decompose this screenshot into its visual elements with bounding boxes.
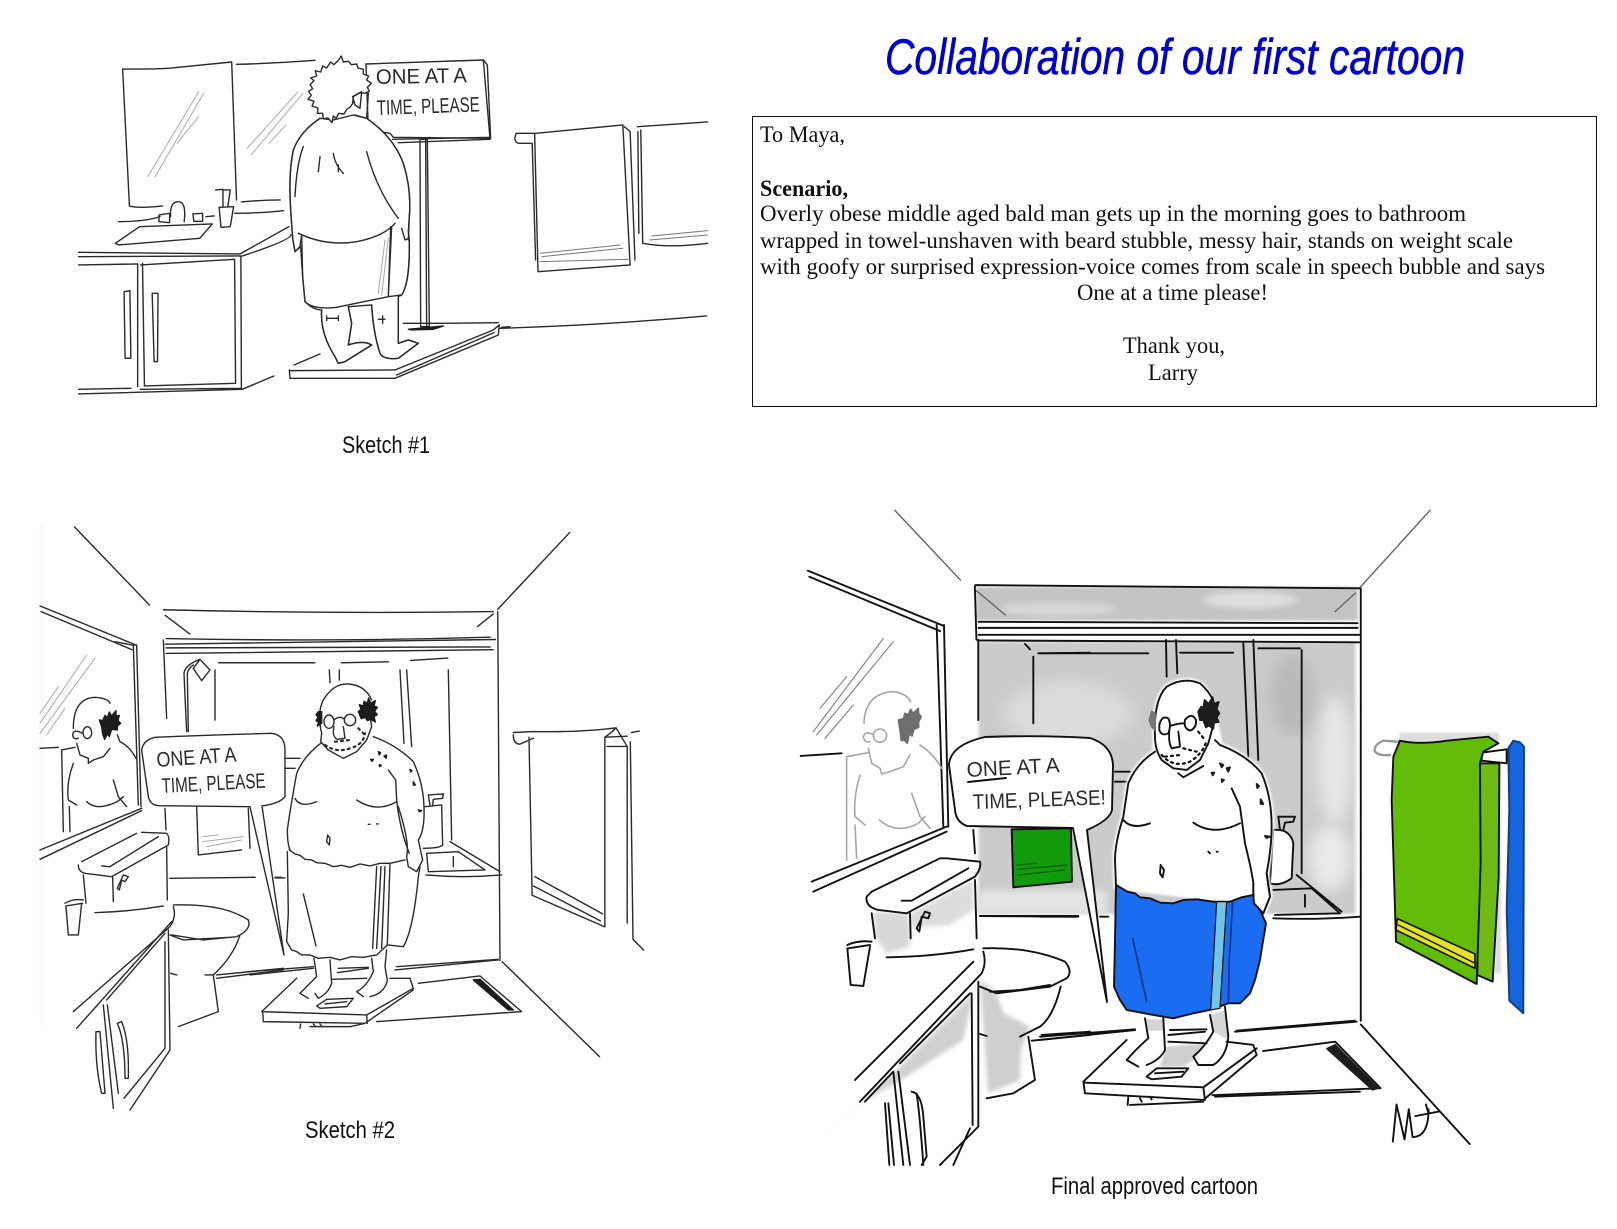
bubble text <box>156 743 266 798</box>
wall lines <box>170 876 285 879</box>
bubble text: TIME, PLEASE <box>161 770 266 798</box>
floor lines <box>250 959 522 1022</box>
head <box>320 684 372 758</box>
toilet <box>980 948 1090 1098</box>
small towel behind bubble <box>197 807 250 855</box>
text block: letter to Maya: Overly obese middle aged bald man gets up in the morning goes to bathroom <box>760 201 1466 226</box>
text block: letter to Maya: Thank you, <box>1123 333 1225 358</box>
text block: letter to Maya: Larry <box>1148 360 1198 385</box>
sign text: ONE AT A <box>376 64 467 89</box>
sign, man and scale <box>289 56 510 378</box>
text block: letter to Maya: Scenario, <box>760 176 848 201</box>
towel <box>287 850 420 960</box>
title: Collaboration of our first cartoon <box>885 29 1465 85</box>
speech bubble <box>949 736 1113 1002</box>
man, tub and scale <box>1040 640 1360 1067</box>
caption: Sketch #1 <box>342 432 430 459</box>
lower man and scale <box>1040 1007 1360 1105</box>
soap bottle <box>1270 830 1293 884</box>
vanity <box>73 907 174 1110</box>
vanity <box>855 952 985 1165</box>
man seen from behind <box>290 56 418 363</box>
white halo <box>1115 681 1272 913</box>
panel: final approved cartoon <box>801 510 1524 1200</box>
mirror reflection <box>62 697 136 832</box>
pole <box>420 139 429 327</box>
bubble text: ONE AT A <box>966 754 1060 782</box>
blue towel <box>1114 885 1266 1018</box>
sign board <box>366 60 490 138</box>
sketch 1 room drawing <box>79 60 708 394</box>
sketch 2 room drawing <box>40 527 644 1057</box>
legs and feet <box>300 950 387 998</box>
cup <box>65 900 83 935</box>
figure silhouette <box>287 684 424 998</box>
panel: sketch 2 <box>40 525 644 1144</box>
toilet tank <box>866 858 980 913</box>
weighing scale <box>1083 1040 1360 1105</box>
text block: letter to Maya: with goofy or surprised expression-voice comes from scale in speech bubble and says <box>760 254 1545 279</box>
floor and scale platform <box>289 323 510 378</box>
bubble text <box>966 754 1106 814</box>
legs and feet <box>1127 1007 1228 1067</box>
text block: letter to Maya: One at a time please! <box>1077 280 1268 305</box>
reflection of man <box>847 692 942 860</box>
sign text: TIME, PLEASE <box>376 93 480 120</box>
toilet tank <box>78 832 169 913</box>
panel: sketch 1 <box>79 56 708 459</box>
figure fill <box>1115 681 1272 913</box>
toilet bowl <box>170 905 283 1027</box>
bubble text: ONE AT A <box>156 743 237 772</box>
man, tub and scale <box>250 670 522 1028</box>
sign text <box>376 64 480 120</box>
text block: letter to Maya: To Maya, <box>760 122 845 147</box>
green towel and blue towel <box>1375 733 1524 1013</box>
speech bubble <box>142 733 285 955</box>
grey wash on fixtures <box>823 880 1030 1135</box>
caption: Final approved cartoon <box>1051 1173 1258 1200</box>
left of room: mirror, bubble, toilet, vanity <box>40 640 285 1110</box>
final cartoon room lines <box>808 510 1470 1144</box>
torso and arms <box>1115 740 1272 913</box>
small green towel <box>1012 828 1072 887</box>
cup <box>847 941 872 986</box>
soap bottle <box>423 794 443 848</box>
weighing scale <box>262 978 413 1028</box>
toilet, cup, vanity <box>847 916 1090 1165</box>
mirror, reflection, small towel, tank top <box>801 625 1090 938</box>
caption: Sketch #2 <box>305 1117 395 1144</box>
head <box>1155 681 1215 770</box>
bubble text: TIME, PLEASE! <box>972 786 1106 814</box>
messy hair <box>308 56 371 123</box>
left page shade <box>40 525 44 1025</box>
legs and feet <box>1127 1007 1228 1067</box>
torso and arms <box>287 737 424 872</box>
signature <box>1393 1104 1439 1142</box>
text block: letter to Maya <box>752 116 1596 406</box>
text block: letter to Maya: wrapped in towel-unshaven with beard stubble, messy hair, stands on weight scale <box>760 228 1513 253</box>
grey wash <box>976 587 1358 914</box>
